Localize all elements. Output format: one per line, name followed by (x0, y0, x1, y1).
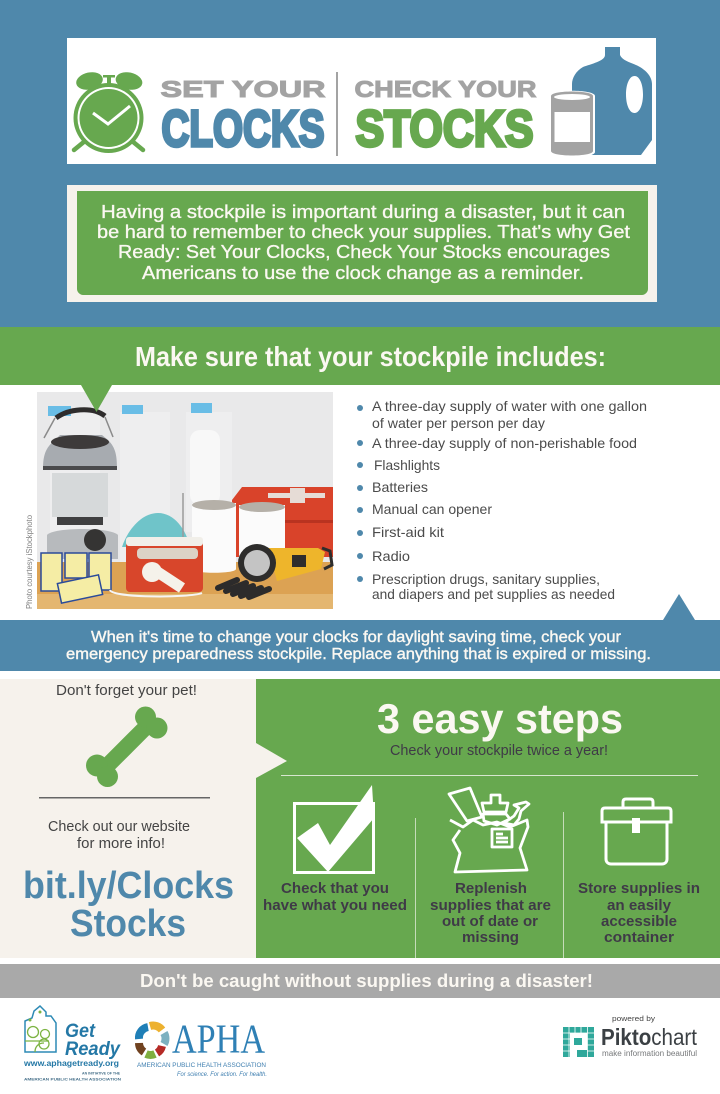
step 1: have what you need (263, 898, 407, 914)
supply checklist: Batteries (372, 479, 428, 495)
top blue section (0, 0, 720, 327)
logo text: set your clocks: SET YOUR (160, 76, 326, 102)
supply checklist: Prescription drugs, sanitary supplies, (372, 571, 600, 587)
icon: water jug (572, 47, 652, 155)
website url: bit.ly/Clocks (23, 865, 234, 907)
intro text: Having a stockpile is important during a disaster, but it can (101, 201, 625, 222)
step 3 (578, 799, 700, 946)
icon: alarm clock (74, 70, 144, 153)
step 2: Replenish (455, 881, 527, 897)
website url: Stocks (70, 903, 186, 945)
panel: 3 easy steps: Check your stockpile twice a year! (390, 743, 608, 759)
website url (23, 865, 234, 945)
crank radio (110, 537, 203, 596)
closing message band (0, 964, 720, 998)
intro panel (67, 185, 657, 302)
logo text: check your stocks: STOCKS (356, 100, 534, 157)
step 3: container (604, 930, 674, 946)
logo: get ready: AN INITIATIVE OF THE (82, 1072, 121, 1076)
step 2: supplies that are (430, 898, 551, 914)
logo: piktochart: make information beautiful (602, 1049, 697, 1058)
supply checklist: Radio (372, 548, 410, 564)
photo: emergency supplies (37, 392, 333, 609)
logo: get ready: Get (65, 1021, 96, 1042)
step 2: missing (462, 930, 519, 946)
logo: APHA: For science. For action. For health. (177, 1072, 267, 1078)
cans (192, 500, 285, 573)
step 1: Check that you (281, 881, 389, 897)
logo: get ready: www.aphagetready.org (23, 1058, 119, 1068)
water bottles (48, 403, 232, 562)
supply checklist: Flashlights (374, 457, 440, 473)
stockpile heading band (0, 327, 720, 412)
logo text: check your stocks (354, 76, 537, 157)
icon: bone (86, 706, 168, 787)
logo: piktochart: powered by (612, 1014, 655, 1023)
step 2 (430, 788, 551, 946)
intro text: Ready: Set Your Clocks, Check Your Stocks encourages (118, 241, 610, 262)
small batteries (218, 580, 269, 597)
logo: APHA: APHA (172, 1016, 265, 1062)
supply checklist: of water per person per day (372, 415, 545, 431)
step 2: out of date or (442, 914, 538, 930)
supply checklist: Manual can opener (372, 501, 492, 517)
step 3: accessible (601, 914, 677, 930)
panel: pet and website: Check out our website (48, 819, 190, 835)
logo: get ready: AMERICAN PUBLIC HEALTH ASSOCIATION (24, 1076, 121, 1082)
icon: piktochart mark (563, 1027, 594, 1057)
logo: APHA: AMERICAN PUBLIC HEALTH ASSOCIATION (137, 1062, 266, 1069)
logo text: set your clocks: CLOCKS (162, 100, 324, 157)
supply checklist: A three-day supply of non-perishable food (372, 435, 637, 451)
first-aid kit (232, 487, 333, 557)
panel: pet and website: Don't forget your pet! (56, 683, 197, 699)
logo: piktochart (563, 1014, 698, 1058)
supply checklist: and diapers and pet supplies as needed (372, 586, 615, 602)
stockpile heading band: Make sure that your stockpile includes: (135, 341, 606, 372)
photo credit: Photo courtesy iStockphoto (24, 515, 34, 609)
flashlight (238, 544, 332, 582)
icon: container (602, 799, 671, 864)
batteries (41, 553, 111, 603)
reminder band: When it's time to change your clocks for daylight saving time, check your (91, 629, 621, 646)
logo text: set your clocks (160, 76, 326, 157)
supply checklist (357, 398, 647, 602)
logo: get ready: Ready (65, 1039, 121, 1060)
logo: piktochart: Piktochart (601, 1024, 698, 1050)
dust mask (122, 513, 190, 547)
intro text: be hard to remember to check your supplies. That's why Get (97, 221, 630, 242)
panel: pet and website (0, 679, 256, 958)
icon: food can (549, 91, 595, 157)
icon: grocery bag (449, 788, 529, 872)
logo: get ready (23, 1006, 121, 1082)
intro text (97, 201, 630, 283)
panel: pet and website: for more info! (77, 836, 165, 852)
step 3: an easily (607, 898, 671, 914)
step 1 (263, 785, 407, 914)
intro text: Americans to use the clock change as a reminder. (142, 262, 584, 283)
steps heading: 3 easy steps (377, 695, 623, 742)
logo banner (67, 38, 656, 164)
panel: 3 easy steps (256, 679, 720, 958)
reminder band (0, 594, 720, 671)
lantern (43, 410, 118, 559)
closing message band: Don't be caught without supplies during a disaster! (140, 971, 593, 991)
step 3: Store supplies in (578, 881, 700, 897)
supply checklist: A three-day supply of water with one gallon (372, 398, 647, 414)
logo text: check your stocks: CHECK YOUR (354, 76, 537, 102)
supply checklist: First-aid kit (372, 524, 444, 540)
reminder band: emergency preparedness stockpile. Replace anything that is expired or missing. (66, 646, 651, 663)
logo: APHA (137, 1016, 267, 1078)
